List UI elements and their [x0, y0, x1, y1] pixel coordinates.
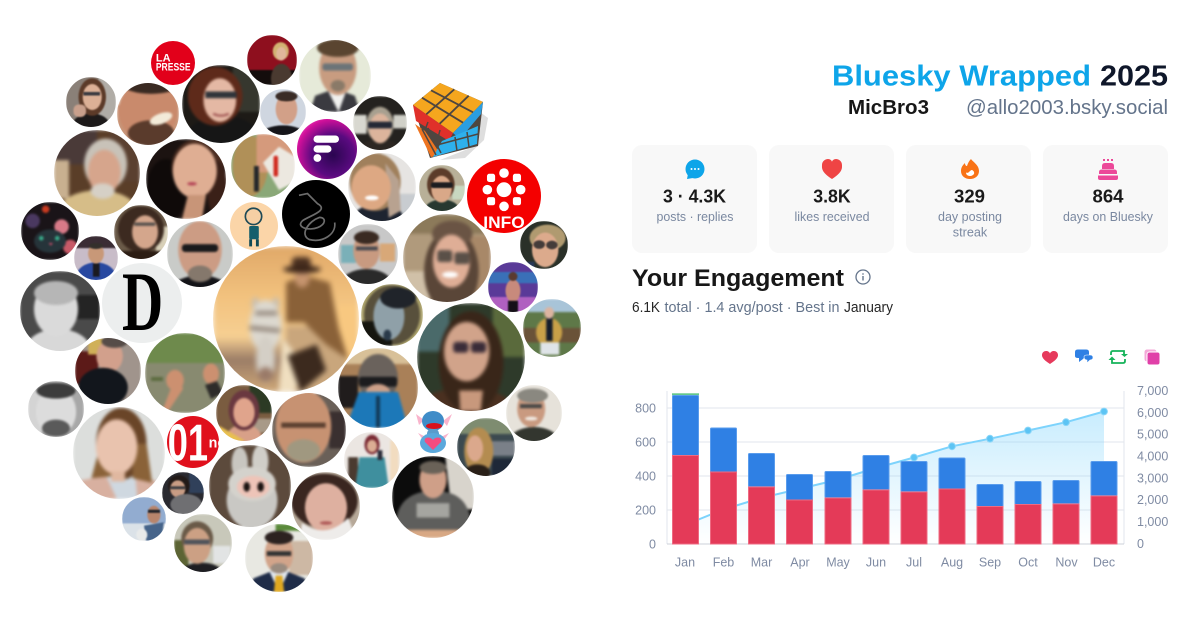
- avatar: woman with large glasses: [403, 214, 491, 302]
- display name and handle: [848, 97, 1168, 119]
- display name and handle: @allo2003.bsky.social: [966, 97, 1168, 119]
- month labels: Jul: [906, 556, 922, 570]
- panel: posts and replies stat: posts · replies: [656, 210, 734, 224]
- avatar: older man with glasses: [506, 385, 562, 441]
- avatar: man with glasses and pale background: [299, 39, 371, 112]
- panel: posting streak stat: 329: [954, 185, 985, 206]
- right axis labels: 2,000: [1137, 493, 1168, 507]
- avatar: woman in car: [353, 96, 407, 150]
- icon: legend heart: [1042, 351, 1058, 364]
- avatar: La Presse logo: [151, 41, 195, 85]
- chart legend icons: [1042, 350, 1160, 365]
- right axis labels: 3,000: [1137, 472, 1168, 486]
- month labels: Sep: [979, 556, 1001, 570]
- right axis labels: 0: [1137, 537, 1144, 551]
- avatar: CBC ICI Info logo: [467, 159, 541, 233]
- right axis labels: 6,000: [1137, 406, 1168, 420]
- avatar: floral cat: [21, 202, 79, 260]
- left axis labels: [635, 402, 656, 552]
- panel: days on Bluesky stat: 864: [1092, 185, 1124, 206]
- avatar: man in blue jacket and beanie: [338, 348, 418, 428]
- icon: blue monster with heart: [416, 411, 452, 453]
- left axis labels: 400: [635, 470, 656, 484]
- avatar: black and white bearded man: [28, 381, 84, 437]
- title: Bluesky Wrapped: [832, 60, 1091, 92]
- panel: likes received stat: 3.8K: [813, 185, 851, 206]
- panel: posts and replies stat: 3 · 4.3K: [663, 185, 727, 206]
- avatar: blonde woman selfie at cafe: [457, 418, 515, 482]
- heading: Your Engagement: Your Engagement: [632, 265, 844, 292]
- avatar: laughing bearded man: [117, 83, 179, 145]
- month labels: Jan: [675, 556, 695, 570]
- avatar: woman with glasses: [66, 77, 116, 127]
- month labels: Feb: [713, 556, 734, 570]
- engagement summary line: 6.1K: [632, 300, 660, 316]
- stacked bars: [672, 393, 1117, 544]
- month labels: Jun: [866, 556, 886, 570]
- icon: chat bubble: [686, 160, 704, 179]
- avatar: young woman with brown hair: [73, 407, 165, 499]
- panel: posting streak stat: [906, 145, 1031, 253]
- icon: birthday cake: [1098, 159, 1118, 180]
- avatar: rider on horse at sunset: [213, 246, 359, 392]
- avatar: D logo: [102, 263, 182, 343]
- engagement summary line: [632, 300, 894, 316]
- avatar: D logo: D: [122, 255, 163, 349]
- avatar: bowling alley: [488, 262, 538, 313]
- month labels: Oct: [1018, 556, 1038, 570]
- avatar: plush Labubu toy: [209, 445, 291, 529]
- avatar: man with glasses on grey: [338, 224, 398, 284]
- avatar: woman with round sunglasses: [520, 221, 568, 269]
- avatar: man with glasses and grey hair: [174, 514, 232, 581]
- avatar: thumbs up in river: [145, 333, 225, 413]
- avatar: woman dark red hair glasses: [182, 65, 260, 143]
- avatar: woman close-up dark hair: [146, 139, 227, 223]
- avatar: man with dog: [75, 335, 141, 407]
- avatar: Peppermint Patty cartoon: [230, 202, 278, 250]
- avatar: woman with cat: [162, 472, 204, 515]
- title: 2025: [1100, 60, 1168, 92]
- panel: posting streak stat: streak: [953, 226, 988, 240]
- icon: legend replies: [1075, 350, 1093, 363]
- month labels: May: [826, 556, 851, 570]
- avatar: old portrait face: [361, 284, 423, 346]
- avatar: cartoon woman in teal dress: [344, 432, 400, 488]
- avatar: man selfie blue sky: [122, 497, 166, 541]
- avatar: 01net logo: 01: [168, 415, 208, 473]
- avatar: man in front of bookshelf: [54, 130, 140, 216]
- avatar: woman with headset: [419, 165, 465, 211]
- icon: heart: [822, 159, 842, 179]
- chart grid: [667, 391, 1124, 544]
- avatar: woman on bench: [523, 299, 581, 357]
- avatar: F app logo: [297, 119, 357, 179]
- panel: likes received stat: [769, 145, 894, 253]
- avatar: man in suit yellow tie: [245, 524, 313, 592]
- month labels: Mar: [751, 556, 772, 570]
- engagement chart: [635, 384, 1168, 570]
- cumulative area and line: [685, 408, 1107, 544]
- panel: posting streak stat: day posting: [938, 210, 1002, 224]
- avatar: woman with white scarf: [291, 472, 360, 540]
- icon: legend quotes: [1144, 350, 1160, 365]
- avatar: bald man with sunglasses: [167, 221, 233, 287]
- avatar bubble cluster: [20, 35, 581, 592]
- icon: Rubik's cube: [413, 83, 488, 160]
- avatar: Metallica black album snake: [282, 180, 350, 248]
- left axis labels: 200: [635, 504, 656, 518]
- panel: likes received stat: likes received: [794, 210, 870, 224]
- right axis labels: 5,000: [1137, 428, 1168, 442]
- avatar: woman on red wallpaper: [247, 35, 297, 85]
- right axis labels: 7,000: [1137, 384, 1168, 398]
- icon: legend reposts: [1108, 351, 1128, 363]
- avatar: bald man portrait: [272, 390, 346, 467]
- panel: days on Bluesky stat: [1043, 145, 1168, 253]
- avatar: curly haired woman glasses: [114, 205, 168, 262]
- month labels: Apr: [790, 556, 810, 570]
- icon: flame: [961, 159, 979, 179]
- right axis labels: 1,000: [1137, 515, 1168, 529]
- avatar: woman in sunglasses long hair: [417, 303, 525, 411]
- right axis labels: [1137, 384, 1168, 551]
- avatar: man on light grey: [260, 89, 306, 135]
- month labels: Aug: [941, 556, 963, 570]
- engagement summary line: January: [844, 300, 894, 316]
- month labels: Dec: [1093, 556, 1115, 570]
- month labels: Nov: [1055, 556, 1078, 570]
- avatar: man in blue suit: [74, 236, 118, 280]
- left axis labels: 600: [635, 436, 656, 450]
- display name and handle: MicBro3: [848, 97, 929, 119]
- avatar: man in grey t-shirt: [392, 456, 474, 538]
- right axis labels: 4,000: [1137, 450, 1168, 464]
- avatar: woman wearing mask: [231, 134, 295, 198]
- avatar: smiling blonde woman: [348, 153, 416, 228]
- left axis labels: 800: [635, 402, 656, 416]
- avatar: woman with yellow top: [216, 385, 272, 455]
- engagement summary line: total · 1.4 avg/post · Best in: [664, 300, 840, 316]
- panel: posts and replies stat: [632, 145, 757, 253]
- icon: info: [856, 270, 870, 284]
- avatar: black and white woman: [20, 271, 100, 351]
- panel: days on Bluesky stat: days on Bluesky: [1063, 210, 1154, 224]
- left axis labels: 0: [649, 538, 656, 552]
- month labels: [675, 556, 1115, 570]
